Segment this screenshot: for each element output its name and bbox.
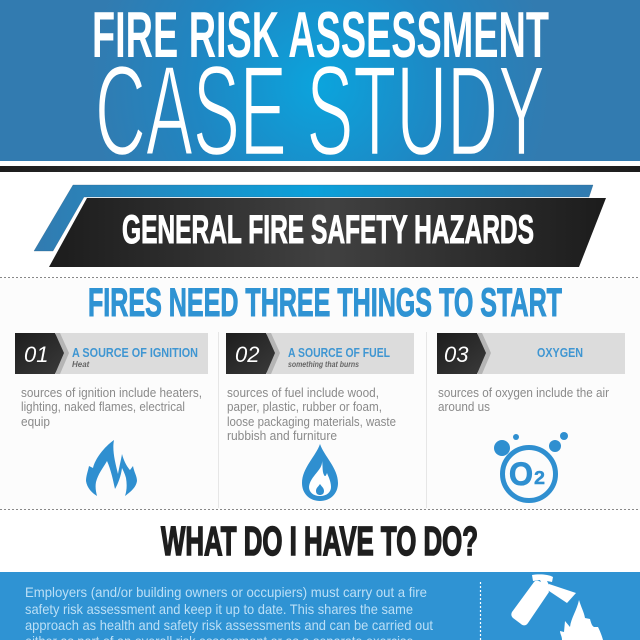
paragraph: safety risk assessment and keep it up to date. This shares the same — [25, 601, 413, 617]
header banner — [0, 0, 640, 183]
icon: o2 molecule: 2 — [534, 468, 545, 488]
description: paper, plastic, rubber or foam, — [227, 399, 382, 414]
step header 02 — [226, 333, 414, 374]
step header 02: something that burns — [288, 360, 359, 369]
description: sources of fuel include wood, — [227, 385, 379, 400]
step header 01 — [15, 333, 208, 374]
section banner: general fire safety hazards — [34, 185, 606, 267]
blue ribbon — [34, 185, 593, 251]
panel: what to do — [0, 572, 640, 640]
description: sources of oxygen include the air — [438, 385, 610, 400]
header divider bar — [0, 166, 640, 172]
paragraph: approach as health and safety risk assessments and can be carried out — [25, 617, 433, 633]
description: around us — [438, 399, 490, 414]
step header 03: OXYGEN — [537, 345, 583, 360]
step header 01: Heat — [72, 360, 90, 369]
panel: oxygen — [437, 333, 625, 500]
icon: flame — [86, 440, 137, 496]
description: equip — [21, 414, 50, 429]
description: rubbish and furniture — [227, 428, 337, 443]
paragraph: Employers (and/or building owners or occupiers) must carry out a fire — [25, 584, 427, 600]
icon: white flame — [560, 600, 603, 640]
icon: fuel drop — [302, 444, 338, 501]
panel: source of ignition — [15, 333, 208, 496]
step header 01: A SOURCE OF IGNITION — [72, 345, 198, 360]
description: lighting, naked flames, electrical — [21, 399, 185, 414]
step header 02: A SOURCE OF FUEL — [288, 345, 390, 360]
step header 03: 03 — [444, 342, 469, 367]
icon: fire extinguisher — [511, 574, 576, 625]
step header 01: 01 — [24, 342, 48, 367]
step header 02: 02 — [235, 342, 259, 367]
step header 03 — [437, 333, 625, 374]
black ribbon — [49, 198, 606, 267]
panel: source of fuel — [226, 333, 414, 501]
description: loose packaging materials, waste — [227, 414, 396, 429]
icon: o2 molecule: O — [509, 456, 533, 492]
icon: o2 molecule — [494, 432, 568, 500]
description: sources of ignition include heaters, — [21, 385, 202, 400]
